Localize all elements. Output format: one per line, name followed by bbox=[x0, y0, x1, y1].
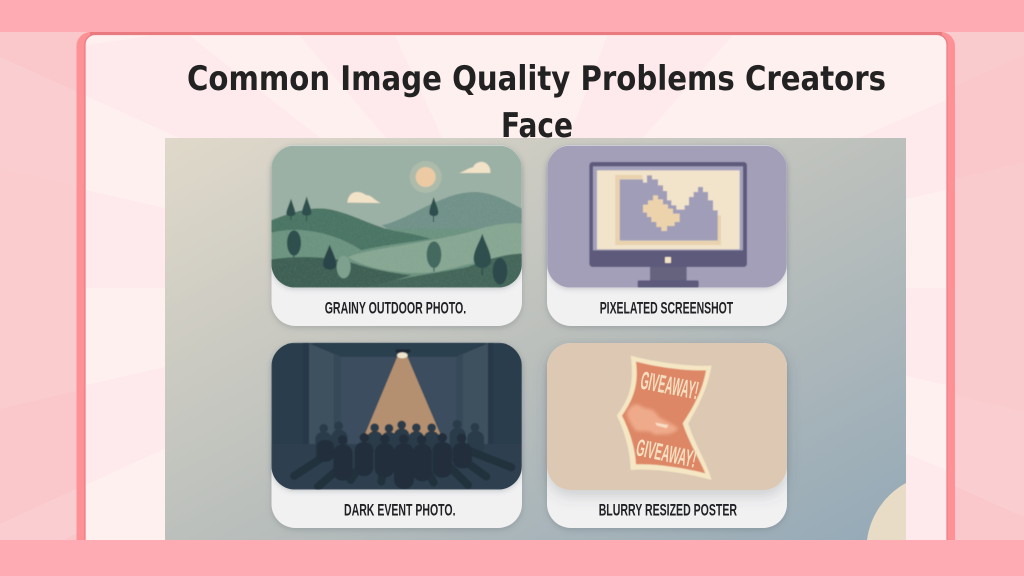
caption: GRAINY OUTDOOR PHOTO. bbox=[325, 300, 466, 318]
card: grainy outdoor photo bbox=[271, 145, 522, 326]
caption: PIXELATED SCREENSHOT bbox=[600, 300, 733, 318]
infographic photo panel bbox=[165, 138, 906, 540]
illustration: warped poster background bbox=[547, 343, 787, 490]
card: pixelated screenshot bbox=[547, 145, 787, 326]
caption: DARK EVENT PHOTO. bbox=[344, 502, 456, 520]
top band bbox=[0, 0, 1024, 32]
title: Common Image Quality Problems Creators bbox=[187, 59, 886, 99]
illustration: dark event crowd bbox=[271, 343, 522, 490]
title: Face bbox=[501, 106, 573, 146]
title bbox=[187, 59, 886, 146]
trees bbox=[286, 196, 507, 285]
card: blurry resized poster bbox=[547, 343, 787, 528]
card: dark event photo bbox=[271, 343, 522, 528]
crowd back row bbox=[315, 420, 484, 444]
bottom band bbox=[0, 540, 1024, 576]
illustration: warped giveaway poster: GIVEAWAY! bbox=[638, 367, 701, 405]
illustration: warped giveaway poster bbox=[617, 356, 712, 480]
illustration: pixelated monitor bbox=[547, 145, 787, 288]
illustration: grainy landscape bbox=[271, 145, 522, 288]
illustration: warped giveaway poster: GIVEAWAY! bbox=[634, 434, 699, 473]
crowd front row and leg shadows bbox=[294, 433, 511, 489]
caption: BLURRY RESIZED POSTER bbox=[599, 502, 737, 520]
